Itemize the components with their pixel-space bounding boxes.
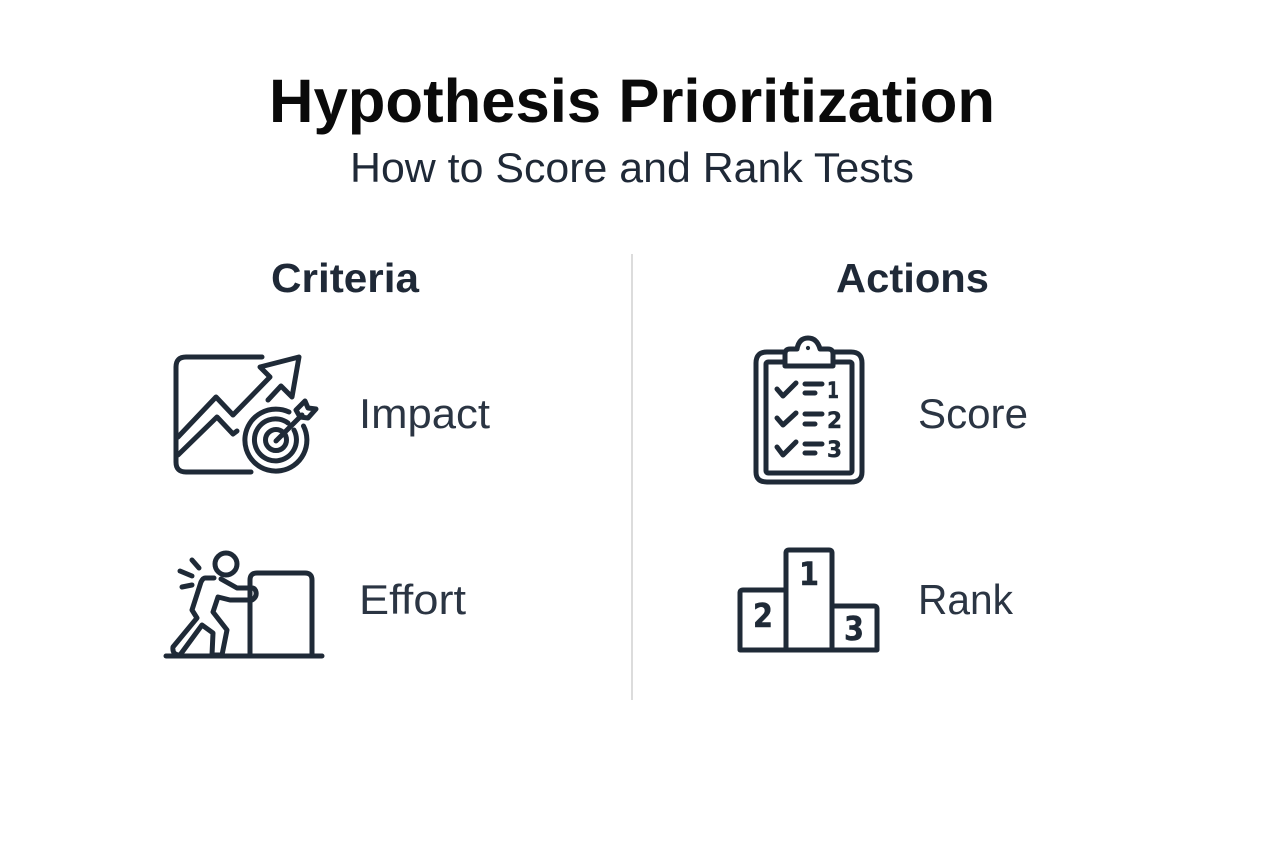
icon: clipboard checklist: 3	[827, 438, 842, 463]
panel: actions	[740, 255, 1028, 650]
heading: criteria: Criteria	[271, 255, 420, 301]
label: impact: Impact	[359, 390, 490, 437]
icon: ranking podium	[740, 550, 877, 650]
icon: impact chart with target	[176, 357, 316, 472]
icon: ranking podium: 2	[753, 596, 773, 635]
icon: clipboard checklist	[756, 338, 862, 482]
label: effort: Effort	[359, 576, 466, 623]
icon: clipboard checklist: 2	[827, 409, 842, 434]
title: Hypothesis Prioritization	[269, 67, 995, 135]
heading: actions: Actions	[836, 255, 989, 301]
panel: criteria	[166, 255, 490, 656]
icon: person pushing box	[166, 553, 322, 656]
label: rank: Rank	[918, 576, 1014, 623]
subtitle: How to Score and Rank Tests	[350, 144, 914, 191]
icon: ranking podium: 1	[799, 555, 819, 593]
icon: clipboard checklist: 1	[827, 379, 839, 404]
label: score: Score	[918, 390, 1028, 437]
icon: ranking podium: 3	[844, 609, 864, 648]
